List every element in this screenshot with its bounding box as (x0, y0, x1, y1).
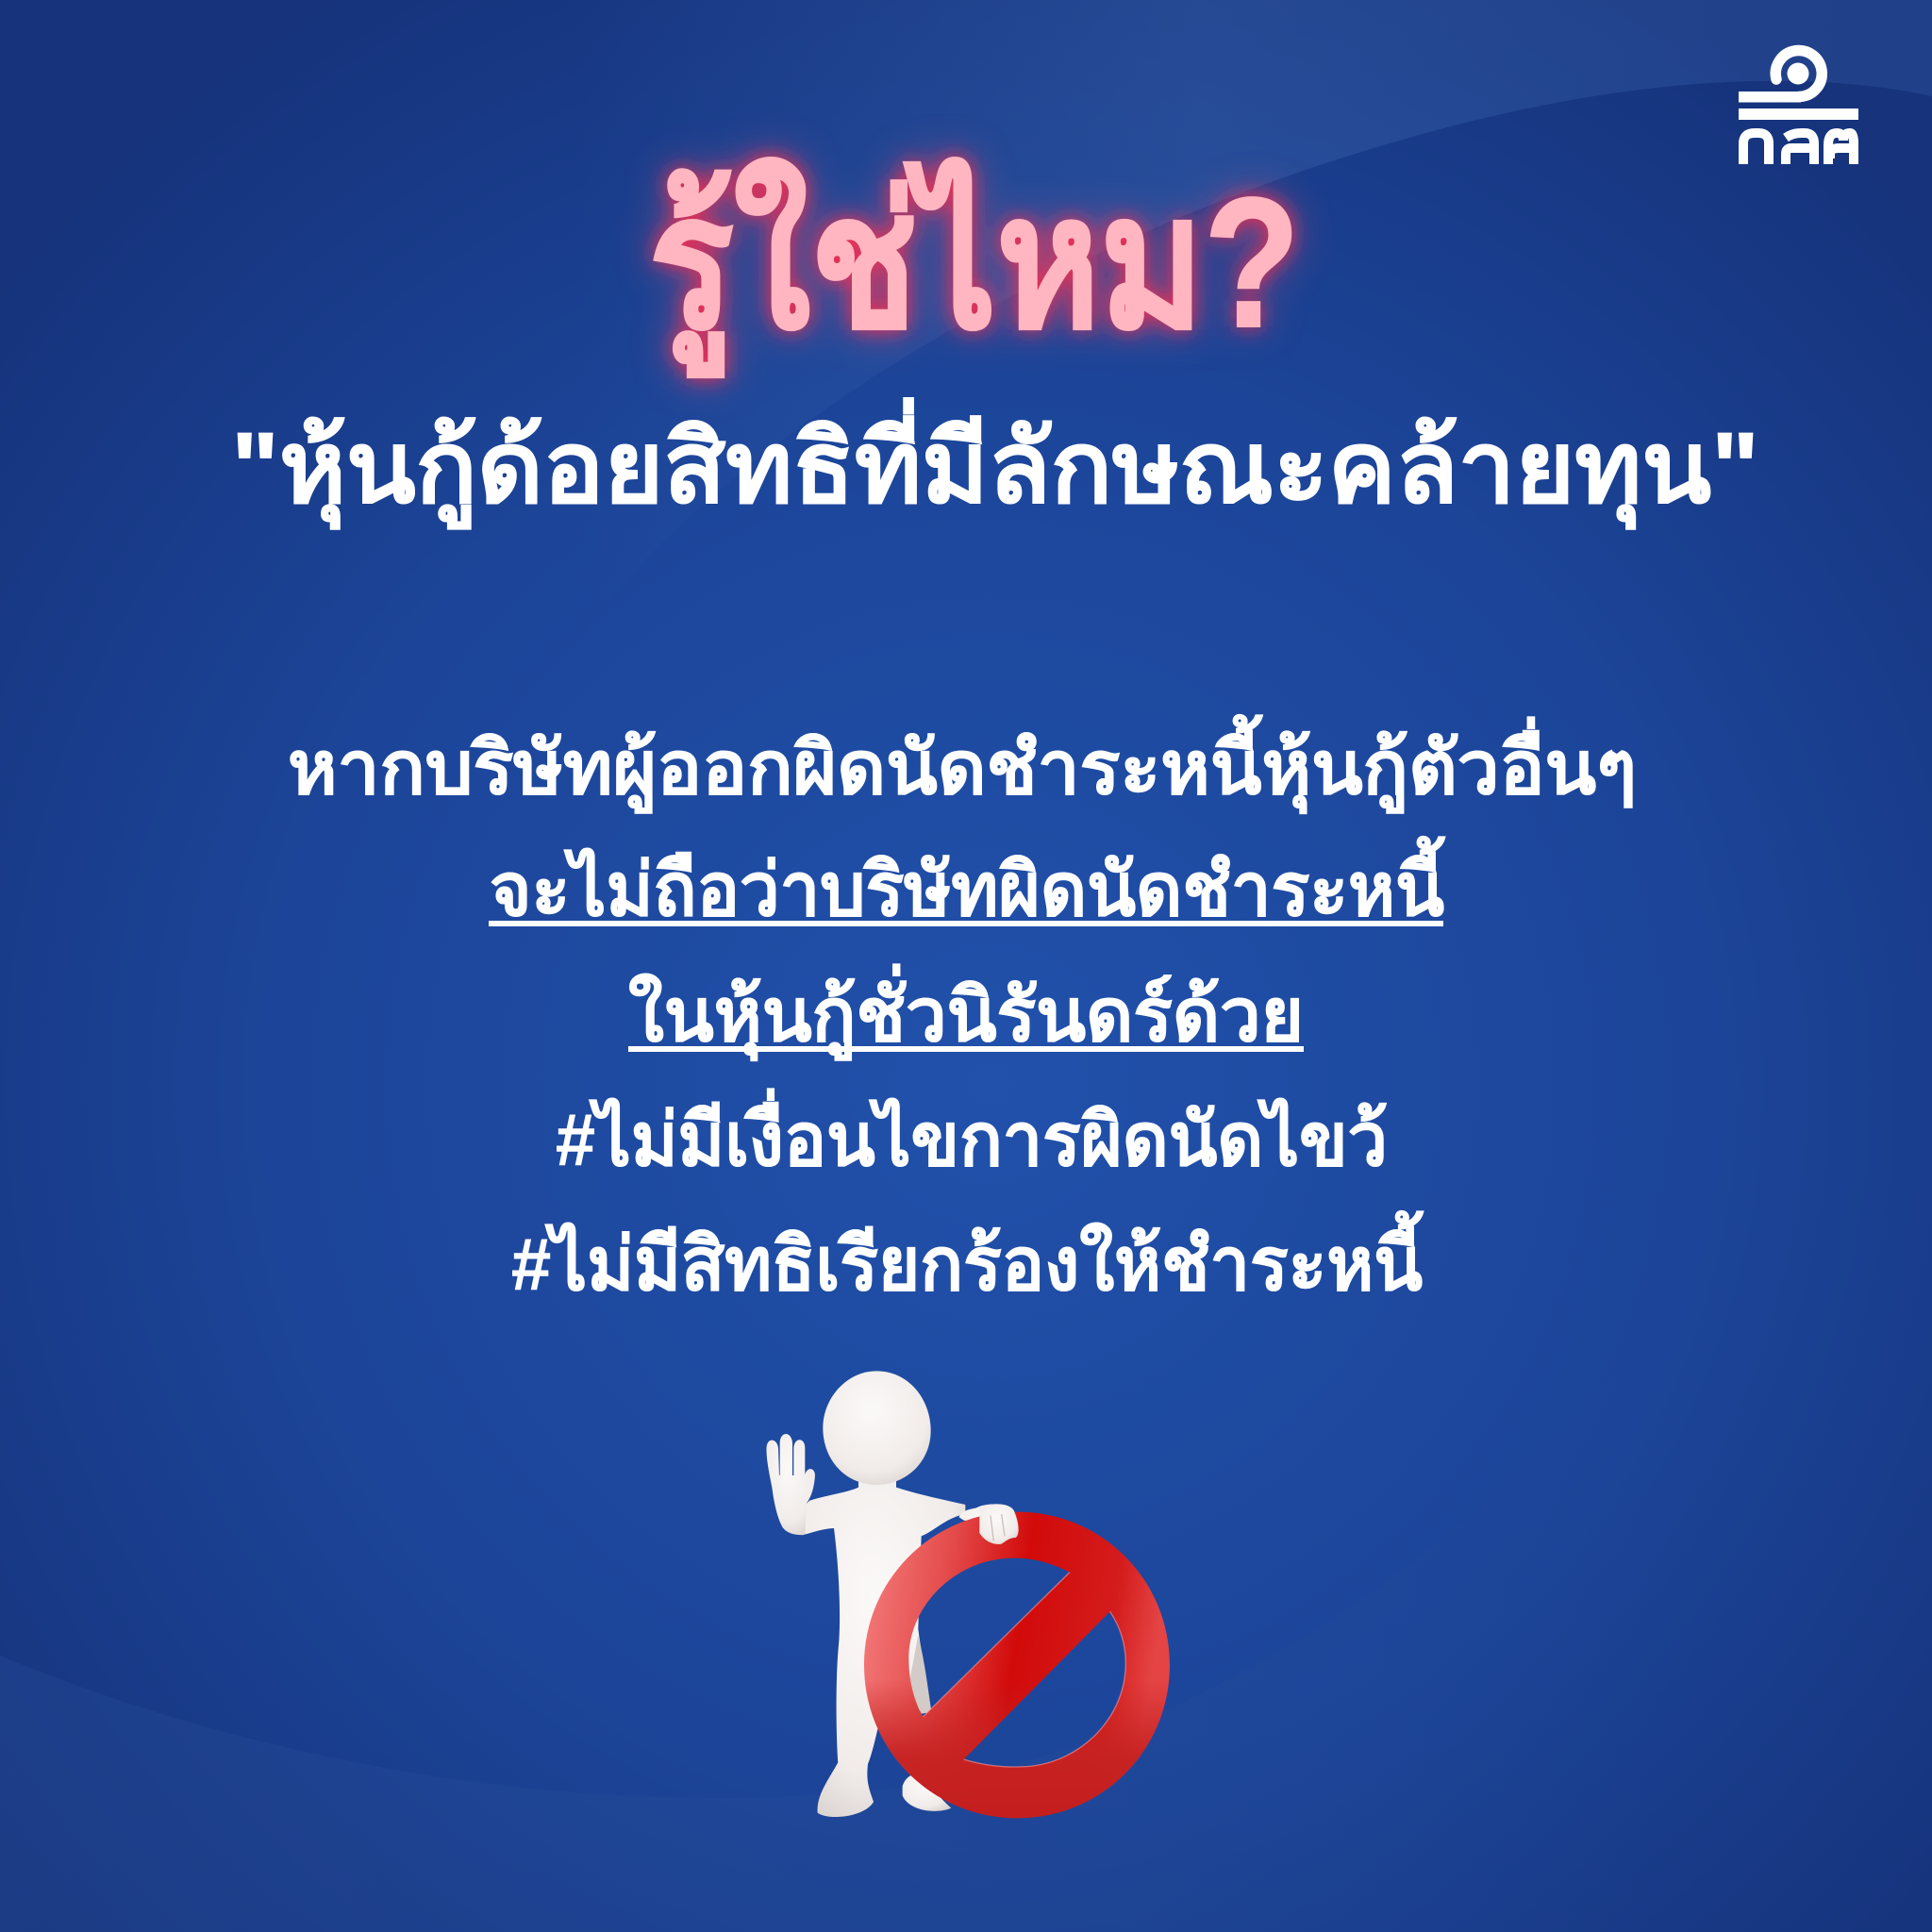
figure (766, 1371, 1019, 1817)
illustration: figure holding a prohibition sign (766, 1371, 1170, 1818)
title glow and heading: รู้ใช่ไหม? (649, 157, 1300, 378)
hashtag line 2: #ไม่มีสิทธิเรียกร้องให้ชำระหนี้ (511, 1210, 1424, 1306)
logo letters (1743, 133, 1854, 164)
prohibition sign (864, 1512, 1170, 1818)
title glow and heading: รู้ใช่ไหม? (649, 157, 1300, 378)
title glow and heading: รู้ใช่ไหม? (649, 157, 1300, 378)
hashtag line 1: #ไม่มีเงื่อนไขการผิดนัดไขว้ (556, 1088, 1388, 1181)
body line 1: หากบริษัทผู้ออกผิดนัดชำระหนี้หุ้นกู้ตัวอื่นๆ (288, 714, 1637, 814)
body line 3, underlined: ในหุ้นกู้ชั่วนิรันดร์ด้วย (628, 963, 1304, 1061)
hand over sign (979, 1504, 1019, 1544)
logo: SEC Thailand (1739, 51, 1858, 164)
subtitle: "หุ้นกู้ด้อยสิทธิที่มีลักษณะคล้ายทุน" (231, 397, 1759, 530)
body line 2, underlined: จะไม่ถือว่าบริษัทผิดนัดชำระหนี้ (490, 836, 1446, 931)
